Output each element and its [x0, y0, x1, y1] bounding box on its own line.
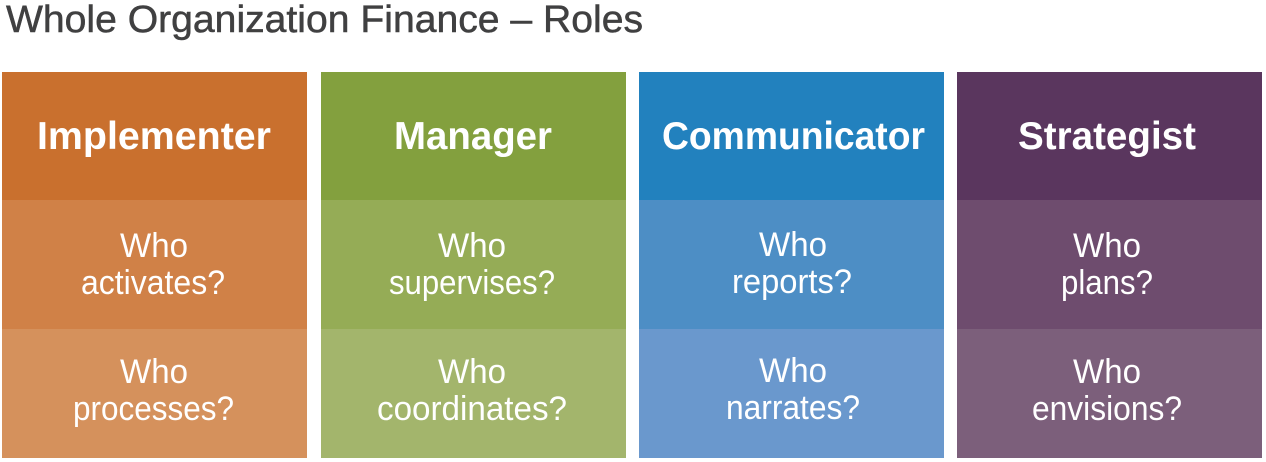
header: Strategist: Strategist: [1018, 115, 1196, 158]
question: Who coordinates?: Who: [438, 353, 506, 391]
question: Who plans?: plans?: [1061, 264, 1153, 302]
question: Who reports?: reports?: [732, 263, 852, 301]
question: Who narrates?: [639, 329, 944, 458]
question: Who supervises?: Who: [438, 227, 506, 265]
question: Who supervises?: [321, 200, 626, 329]
header: Implementer: Implementer: [37, 115, 271, 158]
header: Implementer: [2, 72, 307, 200]
question: Who envisions?: Who: [1073, 353, 1141, 391]
header: Communicator: [639, 72, 944, 200]
title: Whole Organization Finance – Roles: [6, 0, 643, 41]
question: Who reports?: [639, 200, 944, 329]
question: Who activates?: activates?: [81, 264, 225, 302]
header: Strategist: [957, 72, 1262, 200]
panel: Communicator: [639, 72, 944, 458]
header: Manager: Manager: [394, 115, 552, 158]
question: Who processes?: Who: [120, 353, 188, 391]
question: Who envisions?: [957, 329, 1262, 458]
question: Who plans?: [957, 200, 1262, 329]
question: Who narrates?: narrates?: [726, 389, 860, 427]
question: Who reports?: Who: [759, 226, 827, 264]
question: Who coordinates?: coordinates?: [377, 390, 567, 428]
header: Communicator: Communicator: [662, 115, 925, 158]
panel: Implementer: [2, 72, 307, 458]
question: Who plans?: Who: [1073, 227, 1141, 265]
question: Who activates?: [2, 200, 307, 329]
question: Who coordinates?: [321, 329, 626, 458]
question: Who envisions?: envisions?: [1032, 390, 1182, 428]
question: Who processes?: processes?: [73, 390, 234, 428]
header: Manager: [321, 72, 626, 200]
question: Who narrates?: Who: [759, 352, 827, 390]
question: Who supervises?: supervises?: [389, 264, 555, 302]
question: Who processes?: [2, 329, 307, 458]
panel: Manager: [321, 72, 626, 458]
panel: Strategist: [957, 72, 1262, 458]
question: Who activates?: Who: [120, 227, 188, 265]
